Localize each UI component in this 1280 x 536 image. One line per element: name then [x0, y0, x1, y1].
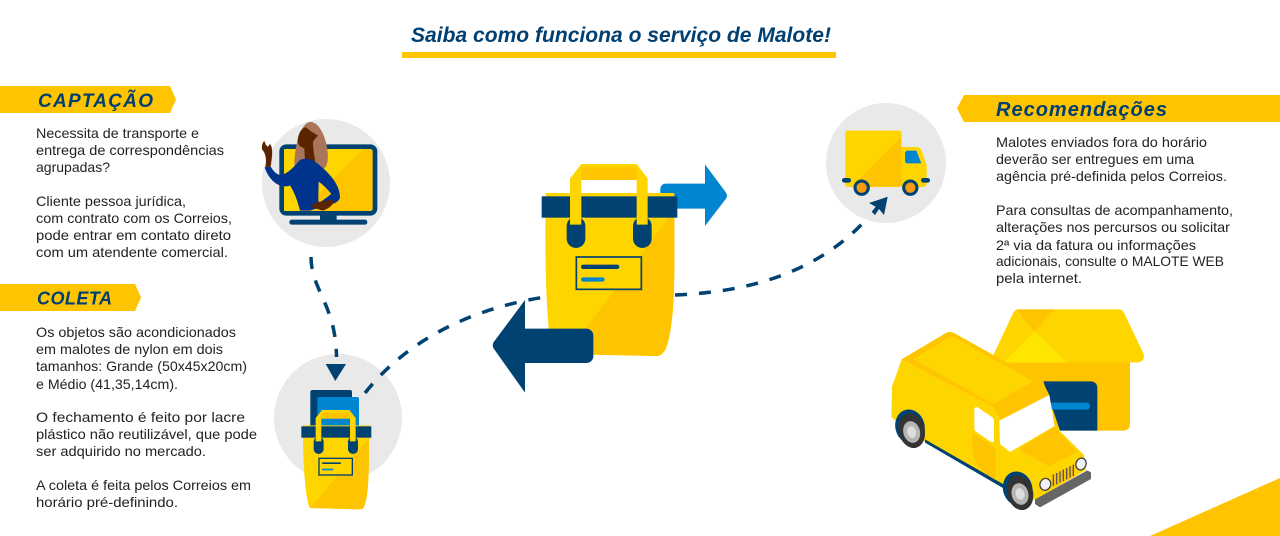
text block: coleta: plástico não reutilizável, que pode — [36, 426, 257, 442]
text block: captação — [36, 125, 232, 260]
title: Saiba como funciona o serviço de Malote! — [411, 24, 831, 47]
van — [891, 332, 1091, 513]
dashed route: malote to truck — [675, 197, 888, 295]
icon: attendant at monitor — [262, 119, 390, 247]
text block: coleta: ser adquirido no mercado. — [36, 443, 206, 459]
text block: recomendações: Para consultas de acompanhamento, — [996, 202, 1233, 218]
heading: coleta — [0, 284, 141, 311]
text block: recomendações: 2ª via da fatura ou informações — [996, 237, 1196, 253]
heading: captação — [0, 86, 176, 113]
icon: van and garage — [891, 309, 1144, 513]
heading: recomendações — [957, 95, 1280, 122]
heading: recomendações: Recomendações — [996, 99, 1167, 121]
text block: coleta: A coleta é feita pelos Correios em — [36, 477, 251, 493]
panel: recomendações — [957, 95, 1280, 286]
text block: captação: agrupadas? — [36, 159, 110, 175]
text block: recomendações: deverão ser entregues em uma — [996, 151, 1194, 167]
text block: coleta: Os objetos são acondicionados — [36, 324, 236, 340]
dashed route: monitor to collection bag — [311, 257, 346, 381]
title — [402, 24, 836, 58]
arrow: outgoing blue — [660, 164, 727, 226]
decorative corner triangle — [1150, 478, 1280, 536]
text block: coleta: horário pré-definindo. — [36, 494, 178, 510]
text block: recomendações: alterações nos percursos ou solicitar — [996, 219, 1230, 235]
text block: coleta: O fechamento é feito por lacre — [36, 409, 245, 425]
text block: coleta: e Médio (41,35,14cm). — [36, 376, 178, 392]
grey circle behind collection bag — [274, 354, 402, 482]
text block: captação: Cliente pessoa jurídica, — [36, 193, 186, 209]
wheel arches and wheels — [891, 406, 1037, 513]
text block: captação: pode entrar em contato direto — [36, 227, 231, 243]
bumper — [1035, 470, 1091, 507]
text block: coleta — [36, 324, 257, 510]
panel: coleta — [0, 284, 257, 510]
text block: coleta: em malotes de nylon em dois — [36, 341, 223, 357]
text block: recomendações: agência pré-definida pelos Correios. — [996, 168, 1227, 184]
heading: coleta: COLETA — [37, 288, 112, 308]
text block: captação: com contrato com os Correios, — [36, 210, 232, 226]
dashed route: collection bag to malote — [365, 297, 545, 393]
garage — [993, 309, 1144, 431]
text block: recomendações: pela internet. — [996, 270, 1082, 286]
panel: captação — [0, 86, 232, 260]
icon: large malote bag — [493, 164, 727, 393]
heading: captação: CAPTAÇÃO — [38, 90, 153, 112]
text block: recomendações — [996, 134, 1233, 286]
text block: recomendações: adicionais, consulte o MALOTE WEB — [996, 253, 1224, 269]
bag body — [545, 193, 674, 356]
grille — [1051, 463, 1075, 487]
text block: captação: entrega de correspondências — [36, 142, 224, 158]
text block: captação: com um atendente comercial. — [36, 244, 228, 260]
arrow: incoming navy — [493, 300, 593, 393]
text block: captação: Necessita de transporte e — [36, 125, 199, 141]
icon: small malote bag with documents — [301, 390, 371, 509]
text block: recomendações: Malotes enviados fora do horário — [996, 134, 1207, 150]
text block: coleta: tamanhos: Grande (50x45x20cm) — [36, 358, 247, 374]
icon: truck in circle — [826, 103, 946, 223]
